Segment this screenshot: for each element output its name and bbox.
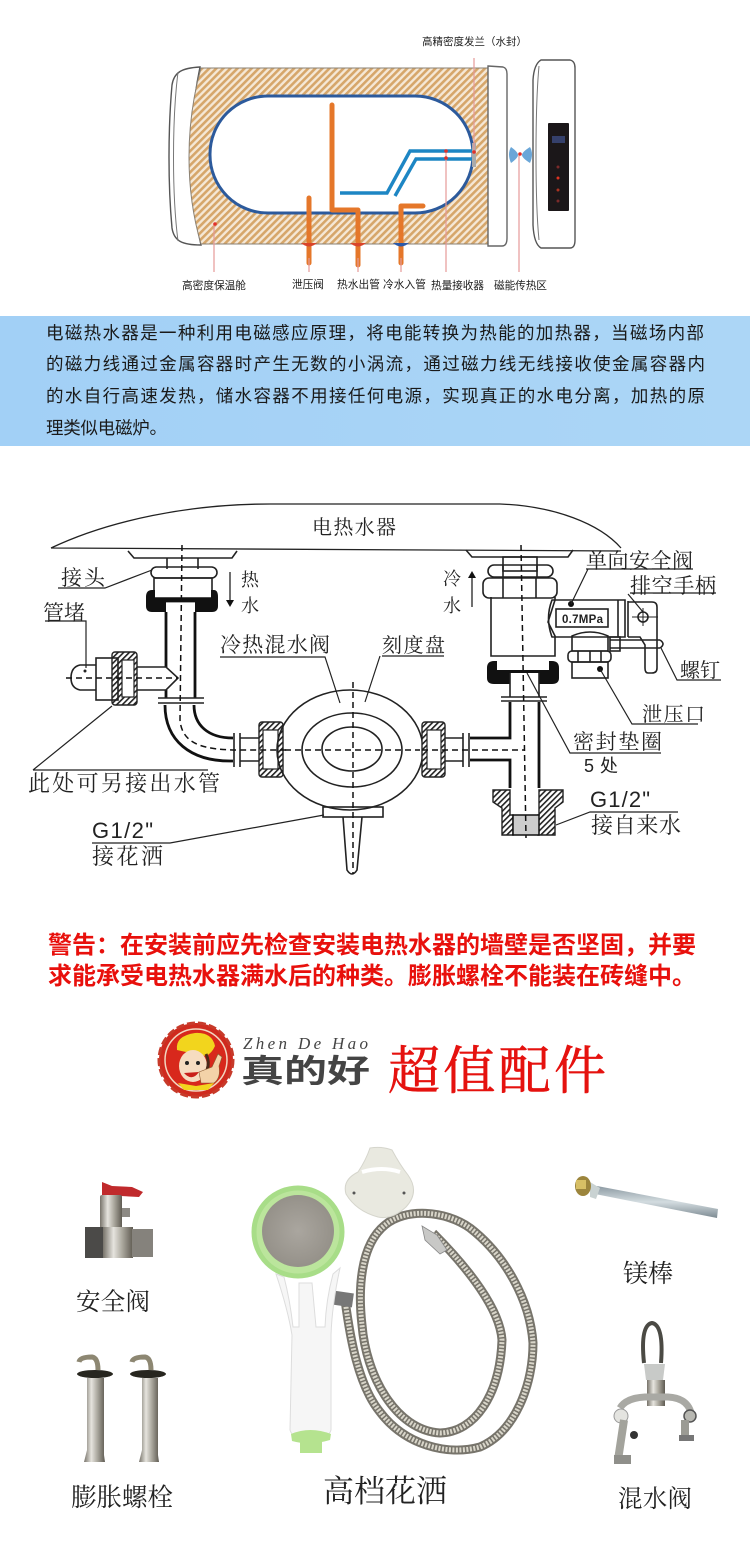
flange bbox=[472, 143, 476, 167]
flange rings bbox=[158, 698, 204, 703]
pipe fittings bbox=[301, 243, 409, 246]
wall holder bbox=[345, 1147, 414, 1218]
arrow: cold water bbox=[468, 571, 476, 607]
diagram labels: 密封垫圈 bbox=[573, 730, 662, 754]
diagram labels: 接花洒 bbox=[92, 844, 163, 869]
tank left end cap bbox=[169, 67, 201, 245]
warning text: 警告：在安装前应先检查安装电热水器的墙壁是否坚固，并要 bbox=[48, 931, 696, 959]
handle bbox=[628, 602, 657, 673]
panel: description band bbox=[0, 316, 750, 446]
label: cold inlet: 冷水入管 bbox=[383, 278, 426, 291]
screw bbox=[610, 640, 660, 648]
magnesium rod bbox=[575, 1176, 718, 1218]
arrow: hot water bbox=[226, 572, 234, 607]
label: G1/2 water: G1/2" bbox=[590, 787, 650, 812]
mixer valve photo bbox=[614, 1323, 696, 1464]
right pipe assembly bbox=[422, 545, 573, 838]
heat receiver coils bbox=[340, 151, 473, 196]
branch bbox=[134, 667, 178, 690]
hose bbox=[332, 1213, 533, 1450]
leader lines bbox=[214, 58, 519, 272]
label: heat receiver: 热量接收器 bbox=[431, 279, 484, 292]
cold water pipe bbox=[401, 206, 423, 263]
label: safety valve: 安全阀 bbox=[76, 1288, 150, 1316]
diagram labels: 螺钉 bbox=[680, 659, 720, 682]
diagram labels: 冷热混水阀 bbox=[220, 633, 330, 657]
panel: accessories bbox=[71, 1147, 718, 1513]
brand name: 真的好 bbox=[241, 1054, 370, 1090]
control panel inner line bbox=[536, 66, 539, 240]
safety valve photo bbox=[85, 1182, 153, 1258]
diagram labels: 排空手柄 bbox=[630, 574, 716, 598]
relief outlet bbox=[572, 632, 608, 651]
centerlines bbox=[180, 545, 290, 750]
expansion bolt 1 bbox=[77, 1357, 113, 1462]
diagram labels: 单向安全阀 bbox=[586, 549, 693, 573]
plug nut bbox=[112, 652, 137, 705]
inner tank capsule bbox=[210, 96, 473, 213]
leader dots bbox=[213, 149, 522, 226]
description text: 的磁力线通过金属容器时产生无数的小涡流，通过磁力线无线接收使金属容器内 bbox=[46, 354, 705, 374]
heater outline bbox=[51, 504, 621, 551]
pressure relief pipe bbox=[306, 198, 312, 263]
mixer valve bbox=[277, 682, 423, 874]
band background bbox=[0, 316, 750, 446]
description text: 电磁热水器是一种利用电磁感应原理，将电能转换为热能的加热器，当磁场内部 bbox=[46, 323, 704, 343]
diagram labels: 接头 bbox=[61, 566, 106, 590]
label: magnesium rod: 镁棒 bbox=[623, 1260, 673, 1288]
warning text bbox=[48, 931, 696, 990]
panel: water heater cutaway bbox=[169, 35, 575, 292]
description text: 的水自行高速发热，储水容器不用接任何电源，实现真正的水电分离，加热的原 bbox=[46, 386, 705, 406]
hot water pipes bbox=[332, 105, 358, 265]
label: magnetic zone: 磁能传热区 bbox=[494, 279, 547, 292]
diagram labels: 水 bbox=[443, 596, 461, 616]
brand pinyin: Zhen De Hao bbox=[243, 1034, 368, 1053]
diagram labels: 冷 bbox=[443, 569, 461, 589]
brand logo bbox=[159, 1023, 606, 1101]
diagram labels: 刻度盘 bbox=[382, 634, 445, 657]
label: expansion bolts: 膨胀螺栓 bbox=[71, 1483, 173, 1512]
diagram labels: 此处可另接出水管 bbox=[28, 771, 220, 796]
description text bbox=[46, 323, 705, 438]
diagram labels: 5处 bbox=[584, 756, 618, 776]
diagram labels: 热 bbox=[241, 570, 260, 590]
insulation body bbox=[189, 68, 490, 244]
label: G1/2 shower: G1/2" bbox=[92, 818, 153, 843]
shower head bbox=[254, 1188, 342, 1453]
label: shower: 高档花洒 bbox=[323, 1474, 447, 1509]
panel: installation diagram bbox=[28, 504, 721, 874]
diagram labels: 接自来水 bbox=[591, 813, 681, 838]
diagram labels: 泄压口 bbox=[642, 703, 705, 726]
label: insulation: 高密度保温舱 bbox=[182, 279, 246, 292]
black gasket bbox=[146, 590, 218, 612]
warning text: 求能承受电热水器满水后的种类。膨胀螺栓不能装在砖缝中。 bbox=[48, 963, 696, 990]
diagram labels: 管堵 bbox=[43, 601, 85, 625]
label: mixer valve: 混水阀 bbox=[618, 1485, 692, 1513]
diagram labels bbox=[28, 549, 720, 869]
heater label: 电热水器 bbox=[312, 516, 396, 539]
tank right end cap bbox=[488, 66, 507, 246]
inlet fitting bbox=[493, 790, 513, 835]
mixer left nut bbox=[259, 722, 283, 777]
accessories heading: 超值配件 bbox=[388, 1044, 606, 1101]
gauge label: 0.7MPa bbox=[562, 614, 604, 626]
black gasket bbox=[487, 661, 559, 684]
left pipe assembly bbox=[66, 545, 290, 777]
tee pipe bbox=[470, 702, 539, 788]
logo badge bbox=[159, 1023, 233, 1097]
label: flange: 高精密度发兰（水封） bbox=[422, 35, 527, 48]
elbow bbox=[165, 705, 233, 761]
icon: magnetic waves bbox=[509, 147, 532, 163]
expansion bolt 2 bbox=[130, 1357, 166, 1462]
description text: 理类似电磁炉。 bbox=[46, 418, 167, 438]
control panel unit bbox=[533, 60, 575, 248]
leader lines bbox=[33, 569, 721, 843]
tank left cap inner line bbox=[174, 72, 178, 241]
display panel bbox=[548, 123, 569, 211]
label: relief valve: 泄压阀 bbox=[292, 278, 324, 291]
safety valve bbox=[548, 600, 663, 678]
vertical pipe bbox=[166, 601, 195, 698]
diagram labels: 水 bbox=[241, 596, 259, 616]
label: hot outlet: 热水出管 bbox=[337, 278, 380, 291]
